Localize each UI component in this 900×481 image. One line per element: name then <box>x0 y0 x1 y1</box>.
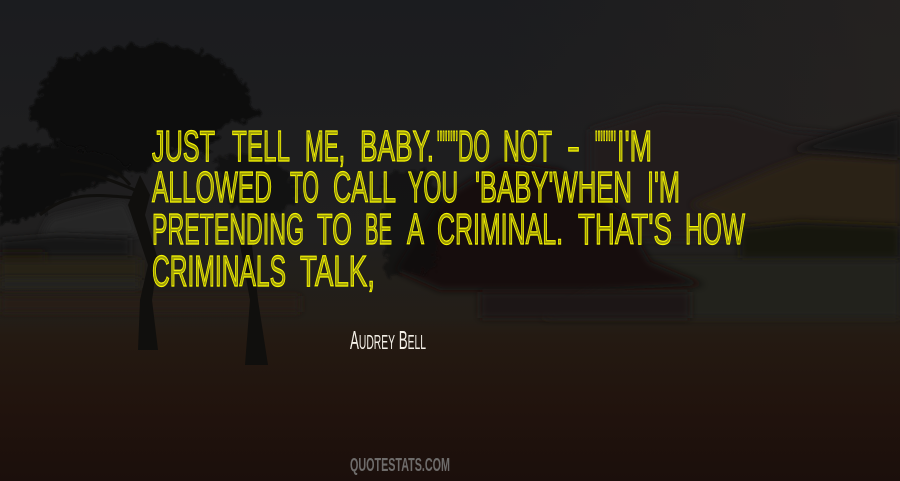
line 3: TO <box>317 205 352 254</box>
line 1: TELL <box>232 122 290 171</box>
right tree line <box>740 222 900 258</box>
water reflections <box>480 292 690 318</box>
quote text <box>152 122 745 296</box>
left field and water <box>0 260 140 278</box>
line 3: THAT'S <box>578 205 672 254</box>
line 1: ME, <box>305 122 345 171</box>
main trunk <box>128 175 158 350</box>
line 3: PRETENDING <box>152 205 304 254</box>
island trees <box>385 168 440 275</box>
left lower foliage <box>0 145 130 225</box>
line 2: CALL <box>333 163 396 212</box>
right water <box>540 260 900 318</box>
left far shore <box>0 235 130 256</box>
line 2: 'BABY'WHEN <box>475 163 632 212</box>
line 2: YOU <box>408 163 458 212</box>
line 1: NOT <box>503 122 552 171</box>
lit hillside <box>690 155 900 232</box>
line 4: TALK, <box>300 247 375 296</box>
second trunk <box>240 245 268 365</box>
branches <box>40 160 135 215</box>
line 2 <box>152 163 680 212</box>
sky tone <box>0 0 900 130</box>
line 3: A <box>407 205 424 254</box>
light sky under branches <box>40 200 140 238</box>
island <box>395 162 705 290</box>
second tree foliage <box>215 152 300 222</box>
line 1 <box>152 122 652 171</box>
canopy <box>28 42 260 175</box>
dark ridge <box>790 116 900 158</box>
line 1: - <box>567 122 580 171</box>
line 2: TO <box>290 163 319 212</box>
line 2: I'M <box>647 163 680 212</box>
line 2: ALLOWED <box>152 163 272 212</box>
author name: AUDREY BELL <box>350 325 426 355</box>
line 1: BABY. <box>360 122 434 171</box>
line 3: CRIMINAL. <box>437 205 563 254</box>
line 4: CRIMINALS <box>152 247 286 296</box>
site credit: QUOTESTATS.COM <box>350 455 450 475</box>
line 3: HOW <box>685 205 745 254</box>
line 1: """" <box>437 122 458 171</box>
line 1: DO <box>458 122 490 171</box>
distant hills <box>590 108 900 240</box>
line 3 <box>152 205 745 254</box>
line 1: """" <box>595 122 616 171</box>
line 3: BE <box>365 205 392 254</box>
line 1: I'M <box>617 122 652 171</box>
trees <box>0 42 440 365</box>
line 1: JUST <box>152 122 215 171</box>
